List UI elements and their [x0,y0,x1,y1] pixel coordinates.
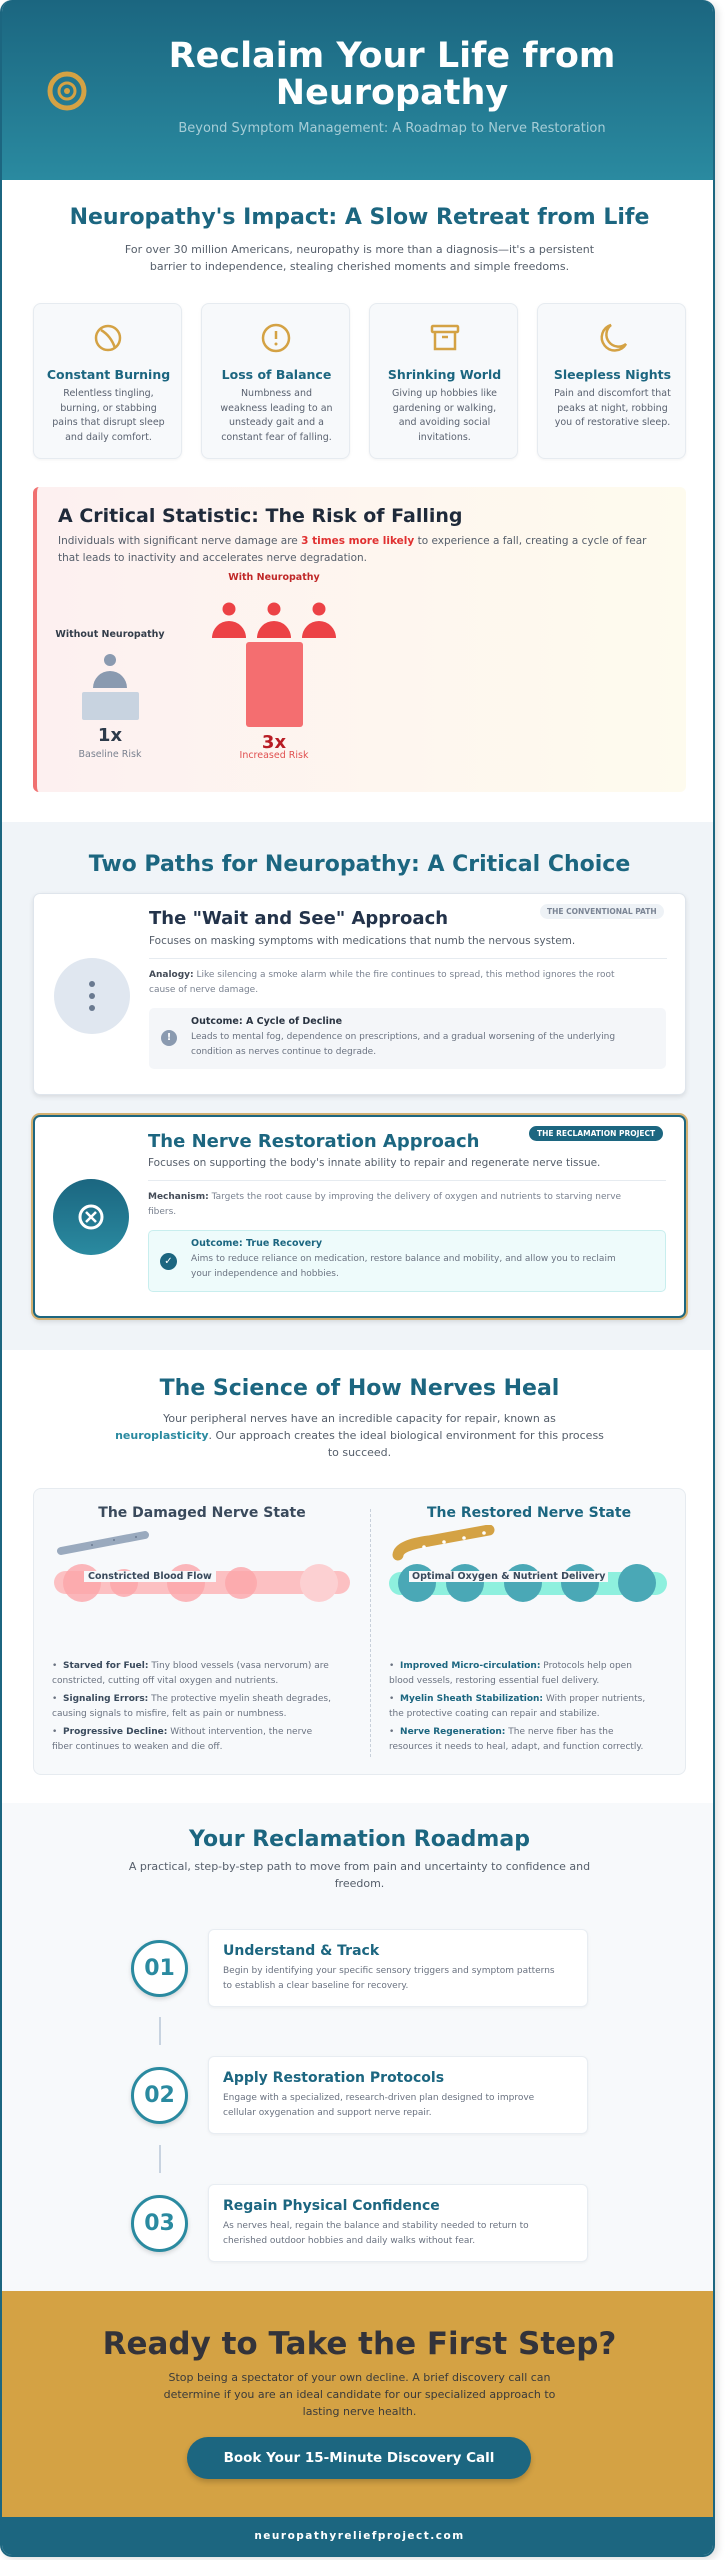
footer: neuropathyreliefproject.com [254,2530,465,2542]
damaged nerve: constricted, cutting off vital oxygen and nutrients. [52,1676,278,1686]
title [169,36,615,113]
title: Reclaim Your Life from [169,36,615,76]
step 2 [130,2056,588,2134]
icon: moon [600,324,627,352]
damaged nerve: • Starved for Fuel: Tiny blood vessels (vasa nervorum) are [52,1661,329,1671]
card: loss of balance: weakness leading to an [220,402,333,414]
intro text: to succeed. [328,1446,391,1459]
chart: without neuropathy [55,629,165,760]
card: loss of balance: unsteady gait and a [229,417,324,428]
damaged nerve: • Signaling Errors: The protective myelin sheath degrades, [52,1694,331,1704]
section: impact [33,205,686,792]
section: call to action: determine if you are an ideal candidate for our specialized approach to [164,2388,555,2401]
card: constant burning: pains that disrupt sleep [52,417,165,428]
intro text [129,1860,590,1890]
icon: box [430,324,460,350]
card: nerve restoration: Focuses on supporting the body's innate ability to repair and regenerate nerve tissue. [148,1157,600,1169]
damaged nerve: causing signals to misfire, felt as pain or numbness. [52,1709,286,1719]
outcome box: ✓ [164,1256,173,1267]
heading: The Science of How Nerves Heal [160,1376,559,1401]
section: call to action: lasting nerve health. [303,2405,416,2418]
card: loss of balance: Loss of Balance [222,367,331,382]
chart: without neuropathy: Without Neuropathy [55,629,165,640]
card: sleepless nights: peaks at night, robbing [557,402,668,414]
restored nerve: Optimal Oxygen & Nutrient Delivery [412,1571,605,1582]
card: shrinking world: gardening or walking, [393,402,496,414]
card: nerve restoration [33,1115,686,1318]
icon: restoration circle [53,1179,129,1255]
card: wait and see [33,893,686,1095]
card: loss of balance: Numbness and [241,388,312,399]
step 2: Apply Restoration Protocols [223,2070,444,2086]
heading: Two Paths for Neuropathy: A Critical Choice [89,852,630,877]
step 3: cherished outdoor hobbies and daily walks without fear. [223,2236,475,2246]
card: shrinking world: Giving up hobbies like [392,388,497,399]
outcome box: condition as nerves continue to degrade. [191,1047,376,1057]
intro text [125,243,594,273]
badge: THE CONVENTIONAL PATH [547,907,657,916]
button: Book Your 15-Minute Discovery Call [224,2450,494,2466]
card: nerve restoration: Mechanism: Targets the root cause by improving the delivery of oxygen and nutrients to starving nerve [148,1192,621,1202]
card: shrinking world: invitations. [418,432,471,442]
step 1: Begin by identifying your specific sensory triggers and symptom patterns [223,1966,555,1976]
outcome box: Outcome: A Cycle of Decline [191,1016,342,1027]
icon: alert [262,324,290,352]
step 3: 03 [144,2211,175,2236]
damaged nerve: fiber continues to weaken and die off. [52,1742,222,1752]
outcome box: Outcome: True Recovery [191,1238,322,1249]
restored nerve: blood vessels, restoring essential fuel delivery. [389,1676,599,1686]
damaged nerve: The Damaged Nerve State [98,1505,306,1521]
chart: with neuropathy [212,572,336,761]
card: sleepless nights: Pain and discomfort that [554,388,671,399]
card: shrinking world: and avoiding social [399,417,490,428]
badge: THE RECLAMATION PROJECT [537,1129,655,1138]
card: wait and see: Analogy: Like silencing a smoke alarm while the fire continues to spread, this method ignores the root [149,970,614,980]
card: constant burning: Constant Burning [47,367,170,382]
restored nerve: the protective coating can repair and stabilize. [389,1709,600,1719]
step 1: to establish a clear baseline for recovery. [223,1981,408,1991]
section: two paths [2,822,717,1350]
card: sleepless nights [537,303,686,459]
badge [529,1126,663,1141]
card: nerve restoration: fibers. [148,1207,176,1217]
section: call to action: Ready to Take the First Step? [103,2326,616,2362]
intro text [115,1412,604,1459]
heading: Your Reclamation Roadmap [189,1827,530,1852]
outcome box: Leads to mental fog, dependence on prescriptions, and a gradual worsening of the underlying [191,1032,615,1042]
panel: critical statistic: Individuals with significant nerve damage are 3 times more likely to experience a fall, creating a cycle of fear [58,535,646,547]
step 2: 02 [144,2083,175,2108]
icon: burning [94,324,122,352]
restored nerve: resources it needs to heal, adapt, and function correctly. [389,1742,643,1752]
card: sleepless nights: you of restorative sleep. [555,417,670,428]
card: constant burning [33,303,182,459]
panel: nerve comparison [33,1488,686,1775]
card: wait and see: cause of nerve damage. [149,985,258,995]
intro text: freedom. [335,1877,384,1890]
panel: critical statistic: A Critical Statistic: The Risk of Falling [58,505,462,527]
restored nerve [389,1505,667,1752]
section: call to action [2,2291,717,2517]
card: constant burning: and daily comfort. [65,432,152,442]
heading: Neuropathy's Impact: A Slow Retreat from Life [70,205,649,230]
damaged nerve: Constricted Blood Flow [88,1571,212,1582]
outcome box: your independence and hobbies. [191,1269,339,1279]
card: loss of balance: constant fear of falling. [221,432,332,442]
footer [2,2517,717,2557]
button [187,2437,531,2479]
step 3 [130,2184,588,2262]
card: constant burning: burning, or stabbing [60,402,157,414]
chart: without neuropathy: Baseline Risk [78,749,142,760]
intro text: barrier to independence, stealing cherished moments and simple freedoms. [150,260,569,273]
outcome box: ! [167,1032,171,1043]
intro text: For over 30 million Americans, neuropathy is more than a diagnosis—it's a persistent [125,243,594,256]
card: wait and see: The "Wait and See" Approach [149,908,448,929]
chart: with neuropathy: Increased Risk [240,750,308,761]
title: Neuropathy [276,73,508,113]
badge [540,904,664,919]
section: roadmap [2,1803,717,2291]
card: constant burning: Relentless tingling, [63,388,154,399]
section: call to action: Stop being a spectator of your own decline. A brief discovery call can [168,2371,551,2384]
card: nerve restoration: The Nerve Restoration Approach [148,1131,480,1152]
card: sleepless nights: Sleepless Nights [554,367,671,382]
subtitle: Beyond Symptom Management: A Roadmap to Nerve Restoration [178,121,606,136]
restored nerve: • Improved Micro-circulation: Protocols help open [389,1661,632,1671]
intro text: Your peripheral nerves have an incredible capacity for repair, known as [163,1412,556,1425]
outcome box [149,1008,666,1069]
restored nerve: • Myelin Sheath Stabilization: With proper nutrients, [389,1694,645,1704]
damaged nerve [52,1505,350,1752]
header [2,0,717,180]
chart: without neuropathy: 1x [98,725,122,746]
step 3: Regain Physical Confidence [223,2198,440,2214]
panel: critical statistic: that leads to inactivity and accelerates nerve degradation. [58,552,367,564]
section: science [33,1376,686,1775]
step 1: Understand & Track [223,1943,379,1959]
icon: dots circle [54,958,130,1034]
damaged nerve: • Progressive Decline: Without intervention, the nerve [52,1727,312,1737]
card: wait and see: Focuses on masking symptoms with medications that numb the nervous system. [149,935,575,947]
panel: critical statistic [33,487,686,792]
restored nerve: The Restored Nerve State [427,1505,631,1521]
outcome box [148,1230,666,1292]
step 1 [130,1929,588,2007]
intro text: A practical, step-by-step path to move from pain and uncertainty to confidence and [129,1860,590,1873]
restored nerve: • Nerve Regeneration: The nerve fiber has the [389,1727,614,1737]
outcome box: Aims to reduce reliance on medication, restore balance and mobility, and allow you to reclaim [191,1254,616,1264]
card: loss of balance [201,303,350,459]
intro text: neuroplasticity. Our approach creates the ideal biological environment for this process [115,1429,604,1442]
card: shrinking world: Shrinking World [388,367,501,382]
step 3: As nerves heal, regain the balance and stability needed to return to [223,2221,529,2231]
chart: with neuropathy: 3x [262,732,286,753]
chart: with neuropathy: With Neuropathy [228,572,320,583]
step 1: 01 [144,1956,175,1981]
step 2: cellular oxygenation and support nerve repair. [223,2108,432,2118]
icon: logo [48,72,86,110]
step 2: Engage with a specialized, research-driven plan designed to improve [223,2093,534,2103]
card: shrinking world [369,303,518,459]
